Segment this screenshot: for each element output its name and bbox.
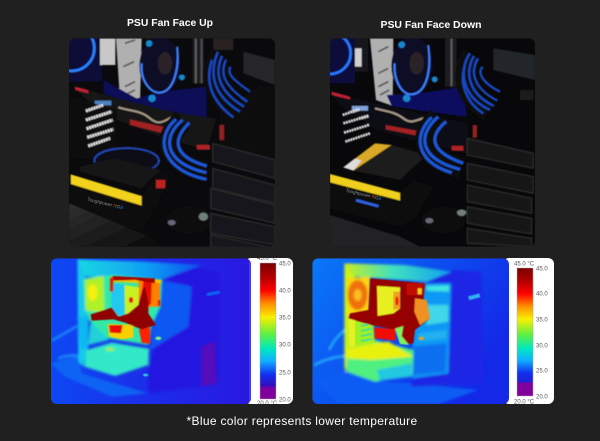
title: PSU Fan Face Up: PSU Fan Face Up xyxy=(127,17,213,29)
heat map: fan face up xyxy=(51,258,251,404)
legend panel: fan face down: 40.0 xyxy=(536,292,548,298)
legend panel: fan face up: 45.0 °C xyxy=(257,256,278,262)
legend panel: fan face down xyxy=(503,258,554,406)
text: PSU front logo: Toughpower RGB xyxy=(87,197,124,210)
legend panel: fan face up: 45.0 xyxy=(279,262,291,268)
legend panel: fan face up: 40.0 xyxy=(279,288,291,294)
legend panel: fan face down: 25.0 xyxy=(536,368,548,374)
thermal image: fan face up xyxy=(51,256,293,407)
legend panel: fan face down: 30.0 xyxy=(536,344,548,350)
heat map: fan face down xyxy=(312,258,509,404)
legend panel: fan face down: 20.0 °C xyxy=(514,400,535,406)
legend panel: fan face up: 35.0 xyxy=(279,316,291,322)
thermal image: fan face down xyxy=(312,258,554,406)
legend panel: fan face down: 45.0 xyxy=(536,266,548,272)
legend panel: fan face up: 20.0 xyxy=(279,398,291,404)
photo: PC case with PSU fan facing down xyxy=(330,38,535,246)
legend panel: fan face down: 45.0 °C xyxy=(514,262,535,268)
legend panel: fan face down: 35.0 xyxy=(536,318,548,324)
legend panel: fan face up: 25.0 xyxy=(279,370,291,376)
text: PSU front logo: Toughpower RGB xyxy=(345,188,382,201)
legend panel: fan face up: 30.0 xyxy=(279,342,291,348)
legend panel: fan face up xyxy=(245,256,293,407)
caption: *Blue color represents lower temperature xyxy=(187,414,417,428)
legend panel: fan face down: 20.0 xyxy=(536,394,548,400)
photo: PC case with PSU fan facing up xyxy=(69,38,275,246)
title: PSU Fan Face Down: PSU Fan Face Down xyxy=(380,19,482,31)
legend panel: fan face up: 20.0 °C xyxy=(257,401,278,407)
